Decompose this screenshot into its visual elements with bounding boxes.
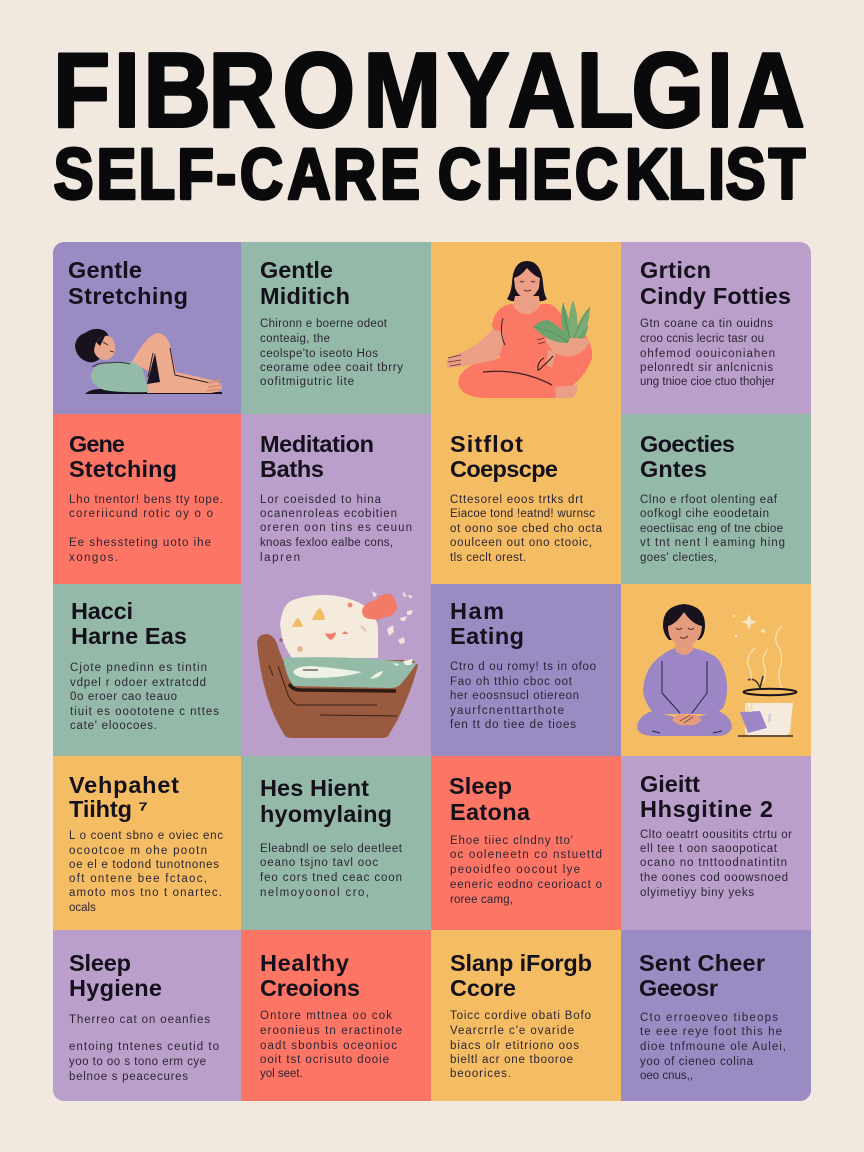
body text: [260, 1010, 402, 1080]
body text: ceorame odee coait tbrry: [260, 362, 403, 374]
body text: Eiacoe tond !eatnd! wurnsc: [450, 508, 595, 520]
body text: Chironn e boerne odeot: [260, 318, 388, 330]
body text: Cttesorel eoos trtks drt: [450, 494, 584, 506]
body text: Ontore mttnea oo cok: [260, 1010, 392, 1022]
body text: Therreo cat on oeanfies: [69, 1014, 210, 1026]
body text: L o coent sbno e oviec enc: [69, 830, 223, 842]
body text: oreren oon tins es ceuun: [260, 522, 412, 534]
heading: Eatona: [450, 799, 531, 825]
heading: Coepscpe: [450, 456, 558, 482]
heading: Meditation: [260, 431, 374, 457]
heading: Sitflot: [450, 431, 523, 457]
panel: sent cheer geeosr: [621, 930, 811, 1101]
body text: goes' clecties,: [640, 552, 717, 564]
body text: oe el e todond tunotnones: [69, 859, 219, 871]
heading: Ccore: [450, 975, 516, 1001]
body text: pelonredt sir anlcnicnis: [640, 362, 773, 374]
heading: [260, 261, 349, 304]
body text: oofkogl cihe eoodetain: [640, 508, 769, 520]
body text: [69, 1014, 219, 1083]
body text: ocootcoe m ohe pootn: [69, 845, 207, 857]
heading: Baths: [260, 456, 324, 482]
body text: conteaig, the: [260, 333, 330, 345]
body text: cate' eloocoes.: [70, 720, 157, 732]
heading: [640, 257, 791, 309]
body text: bieltl acr one tbooroe: [450, 1054, 573, 1066]
body text: te eee reye foot this he: [640, 1026, 782, 1038]
icon: person lying with knees up: [75, 329, 222, 394]
body text: eoectiisac eng of tne cbioe: [640, 523, 783, 535]
body text: ocano no tnttoodnatintitn: [640, 857, 787, 869]
panel: sleep hygiene: [53, 930, 241, 1101]
body text: oeo cnus,,: [640, 1070, 693, 1082]
panel: goecties gntes: [621, 414, 811, 584]
panel: hacci harne eas: [53, 584, 241, 756]
title line 1: FIBROMYALGIA: [53, 32, 805, 150]
body text: Fao oh tthio cboc oot: [450, 676, 573, 688]
heading: [450, 950, 592, 1001]
body text: belnoe s peacecures: [69, 1071, 188, 1083]
heading: Cindy Fotties: [640, 283, 791, 309]
body text: oft ontene bee fctaoc,: [69, 873, 207, 885]
heading: Eating: [450, 623, 524, 649]
heading: Sleep: [69, 950, 131, 976]
body text: [450, 1010, 591, 1080]
heading: Grticn: [640, 257, 711, 283]
body text: ooulceen out ono ctooic,: [450, 537, 592, 549]
heading: [68, 257, 188, 309]
body text: nelmoyoonol cro,: [260, 887, 369, 899]
heading: [260, 775, 392, 827]
heading: Goecties: [640, 431, 735, 457]
panel: yellow tall illustration: [431, 242, 621, 584]
heading: Gene: [69, 431, 125, 457]
body text: ocals: [69, 902, 96, 914]
body text: Ehoe tiiec clndny tto': [450, 835, 573, 847]
body text: xongos.: [69, 552, 118, 564]
body text: oofitmigutric lite: [260, 376, 354, 388]
panel: hes hient hyomylaing: [241, 756, 431, 930]
heading: [70, 436, 176, 482]
body text: Toicc cordive obati Bofo: [450, 1010, 591, 1022]
body text: Ee shessteting uoto ihe: [69, 537, 211, 549]
body text: ceolspe'to iseoto Hos: [260, 348, 378, 360]
panel: healthy creoions: [241, 930, 431, 1101]
heading: Tiihtg ⁷: [69, 796, 148, 822]
body text: Lho tnentor! bens tty tope.: [69, 494, 223, 506]
body text: coreriicund rotic oy o o: [69, 508, 213, 520]
panel: gene stetching: [53, 414, 241, 584]
heading: Gentle: [68, 257, 142, 283]
body text: her eoosnsucl otiereon: [450, 690, 579, 702]
heading: [639, 950, 765, 1001]
body text: Cto erroeoveo tibeops: [640, 1012, 778, 1024]
body text: [69, 830, 223, 914]
body text: lapren: [260, 552, 300, 564]
heading: Geeosr: [639, 975, 718, 1001]
body text: yol seet.: [260, 1068, 303, 1080]
body text: [70, 662, 219, 732]
title line 2: SELF-CARE CHECKLIST: [54, 134, 805, 213]
heading: [640, 771, 773, 822]
title: [53, 32, 805, 213]
heading: Ham: [450, 598, 504, 624]
body text: oadt sbonbis oceonioc: [260, 1040, 397, 1052]
body text: ocanenroleas ecobitien: [260, 508, 397, 520]
heading: [69, 950, 162, 1001]
body text: peooidfeo oocout lye: [450, 864, 580, 876]
heading: Hes Hient: [260, 775, 369, 801]
body text: yoo of cieneo colina: [640, 1056, 754, 1068]
checklist grid: [53, 242, 811, 1101]
body text: eeneric eodno ceorioact o: [450, 879, 602, 891]
heading: Sleep: [449, 773, 512, 799]
body text: amoto mos tno t onartec.: [69, 887, 222, 899]
body text: croo ccnis lecric tasr ou: [640, 333, 764, 345]
icon: meditating person with tea: [637, 604, 796, 736]
body text: feo cors tned ceac coon: [260, 872, 402, 884]
heading: [69, 772, 179, 822]
body text: tiuit es ooototene c nttes: [70, 706, 219, 718]
body text: [260, 843, 403, 899]
heading: Hacci: [71, 598, 133, 624]
body text: [450, 494, 603, 564]
heading: Stretching: [68, 283, 188, 309]
icon: bathtub with steam: [257, 591, 418, 738]
heading: [260, 950, 360, 1001]
body text: eroonieus tn eractinote: [260, 1025, 402, 1037]
body text: [640, 494, 785, 564]
body text: ot oono soe cbed cho octa: [450, 523, 603, 535]
body text: olyimetiyy biny yeks: [640, 887, 754, 899]
heading: hyomylaing: [260, 801, 392, 827]
heading: Creoions: [260, 975, 360, 1001]
heading: Gentle: [260, 257, 333, 283]
heading: Gieitt: [640, 771, 700, 797]
body text: [640, 1012, 786, 1082]
body text: Clno e rfoot olenting eaf: [640, 494, 778, 506]
heading: Miditich: [260, 283, 350, 309]
heading: Hygiene: [69, 975, 162, 1001]
body text: ung tnioe cioe ctuo thohjer: [640, 376, 775, 388]
body text: [640, 829, 792, 899]
panel: gentle stretching: [53, 242, 241, 414]
body text: tls ceclt orest.: [450, 552, 526, 564]
body text: Lor coeisded to hina: [260, 494, 382, 506]
heading: Hhsgitine 2: [640, 796, 773, 822]
body text: yoo to oo s tono erm cye: [69, 1056, 206, 1068]
heading: [449, 773, 531, 825]
body text: [450, 661, 596, 731]
body text: Eleabndl oe selo deetleet: [260, 843, 403, 855]
heading: Healthy: [260, 950, 349, 976]
body text: ohfemod oouiconiahen: [640, 348, 775, 360]
heading: Vehpahet: [69, 772, 179, 798]
heading: [452, 603, 522, 649]
heading: Gntes: [640, 456, 707, 482]
heading: Harne Eas: [71, 623, 187, 649]
body text: knoas fexloo ealbe cons,: [260, 537, 393, 549]
body text: yaurfcnenttarthote: [450, 705, 564, 717]
panel: gieitt hhsgitine 2: [621, 756, 811, 930]
body text: biacs olr etitriono oos: [450, 1040, 579, 1052]
body text: beoorices.: [450, 1068, 511, 1080]
panel: slanp iforgb ccore: [431, 930, 621, 1101]
heading: Stetching: [69, 456, 177, 482]
body text: roree camg,: [450, 894, 513, 906]
body text: vt tnt nent l eaming hing: [640, 537, 785, 549]
panel: bath illustration: [241, 584, 431, 756]
panel: gentle miditich: [241, 242, 431, 414]
body text: dioe tnfmoune ole Aulei,: [640, 1041, 786, 1053]
panel: vehpahet tiihtg: [53, 756, 241, 930]
body text: oeano tsjno tavl ooc: [260, 857, 378, 869]
body text: [640, 318, 775, 388]
body text: ooit tst ocrisuto dooie: [260, 1054, 389, 1066]
body text: fen tt do tiee de tioes: [450, 719, 576, 731]
body text: oc ooleneetn co nstuettd: [450, 849, 602, 861]
body text: [260, 494, 412, 564]
body text: vdpel r odoer extratcdd: [70, 677, 206, 689]
heading: Sent Cheer: [639, 950, 765, 976]
panel: yellow meditation illustration: [621, 584, 811, 756]
heading: Slanp iForgb: [450, 950, 592, 976]
panel: meditation baths: [241, 414, 431, 584]
panel: grtion cindy fotties: [621, 242, 811, 414]
heading: [72, 602, 186, 644]
body text: Clto oeatrt oousitits ctrtu or: [640, 829, 792, 841]
body text: ell tee t oon saoopoticat: [640, 843, 778, 855]
body text: Cjote pnedinn es tintin: [70, 662, 207, 674]
icon: seated woman with plant: [446, 261, 592, 398]
panel: sleep eatona: [431, 756, 621, 930]
body text: Ctro d ou romy! ts in ofoo: [450, 661, 596, 673]
body text: the oones cod ooowsnoed: [640, 872, 788, 884]
panel: ham eating: [431, 584, 621, 756]
body text: [450, 835, 602, 906]
body text: [260, 318, 403, 388]
body text: [69, 494, 223, 564]
heading: [640, 435, 734, 477]
body text: Gtn coane ca tin ouidns: [640, 318, 773, 330]
body text: Vearcrrle c'e ovaride: [450, 1025, 574, 1037]
heading: [450, 431, 558, 482]
body text: 0o eroer cao teauo: [70, 691, 177, 703]
heading: [262, 435, 373, 477]
body text: entoing tntenes ceutid to: [69, 1041, 219, 1053]
